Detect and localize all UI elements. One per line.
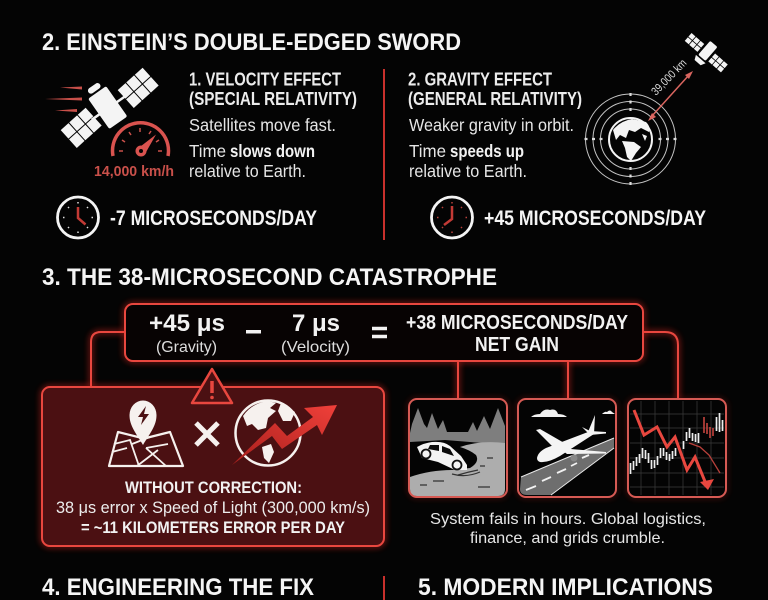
gravity term: +45 μs: [149, 310, 225, 337]
consequences text: System fails in hours. Global logistics,: [430, 511, 706, 528]
icon: earth with gravity rings: [584, 93, 676, 185]
gravity title: [408, 70, 582, 109]
correction text: [56, 479, 370, 537]
icon: map with pin: [109, 400, 183, 466]
gravity result: +45 MICROSECONDS/DAY: [484, 206, 706, 230]
speed label: 14,000 km/h: [94, 163, 174, 180]
gravity description: speeds up: [450, 141, 524, 161]
velocity description: relative to Earth.: [189, 161, 306, 181]
gravity description: [409, 115, 574, 181]
panel: equation: [125, 304, 643, 361]
icon: globe with error arrow: [232, 400, 337, 466]
velocity result: -7 MICROSECONDS/DAY: [110, 206, 317, 230]
gravity description: relative to Earth.: [409, 161, 527, 181]
panel: without correction: [42, 369, 384, 546]
minus sign: [246, 330, 261, 334]
correction text: = ~11 KILOMETERS ERROR PER DAY: [81, 519, 345, 537]
airplane: [536, 415, 606, 462]
velocity description: Satellites move fast.: [189, 115, 336, 135]
chart grid: [630, 401, 724, 495]
velocity term: [281, 310, 350, 356]
consequences text: finance, and grids crumble.: [470, 530, 665, 547]
clouds: [531, 410, 615, 417]
icon: clock minus 7: [58, 197, 98, 238]
car: [417, 442, 467, 470]
gravity description: Time: [409, 141, 446, 161]
net gain: +38 MICROSECONDS/DAY: [406, 312, 629, 334]
icon: clock plus 45: [432, 197, 472, 238]
correction text: WITHOUT CORRECTION:: [125, 479, 302, 497]
gravity title: 2. GRAVITY EFFECT: [408, 70, 552, 90]
net gain: [406, 312, 629, 356]
velocity description: slows down: [230, 141, 315, 161]
runway: [520, 438, 614, 495]
icon: warning triangle: [192, 369, 232, 403]
net gain: NET GAIN: [475, 334, 559, 356]
crash line: [634, 410, 706, 484]
gravity term: [149, 310, 225, 356]
equals sign: [372, 328, 387, 336]
gravity title: (GENERAL RELATIVITY): [408, 89, 582, 109]
consequences text: [430, 511, 706, 547]
icon: speedometer: [112, 123, 168, 156]
velocity term: 7 μs: [292, 310, 340, 337]
distance label: 39,000 km: [650, 57, 689, 98]
divider: sections: [383, 69, 385, 240]
icon: small satellite: [679, 28, 732, 78]
gravity term: (Gravity): [156, 339, 217, 356]
connector lines: [91, 332, 678, 399]
heading: section 3: 3. THE 38-MICROSECOND CATASTROPHE: [42, 264, 497, 291]
velocity title: (SPECIAL RELATIVITY): [189, 89, 357, 109]
arrow: orbital distance: [648, 71, 693, 121]
multiply sign: [196, 423, 218, 445]
panel: airplane off runway: [518, 399, 616, 497]
panel: velocity effect: [45, 68, 357, 238]
panel: car in water: [409, 399, 507, 497]
icon: speeding satellite: [45, 68, 159, 148]
velocity description: [189, 115, 336, 181]
panel: gravity effect: [408, 28, 732, 238]
ripples and dashes: [420, 458, 493, 487]
forest: [410, 408, 505, 445]
gravity description: Weaker gravity in orbit.: [409, 115, 574, 135]
panel: market crash chart: [628, 399, 726, 497]
divider: lower sections: [383, 576, 385, 600]
velocity term: (Velocity): [281, 339, 350, 356]
correction text: 38 μs error x Speed of Light (300,000 km/s): [56, 499, 370, 517]
velocity title: 1. VELOCITY EFFECT: [189, 70, 341, 90]
candlesticks: [630, 413, 722, 474]
lake: [410, 442, 505, 496]
velocity description: Time: [189, 141, 226, 161]
heading: section 2: 2. EINSTEIN’S DOUBLE-EDGED SWORD: [42, 29, 461, 56]
velocity title: [189, 70, 357, 109]
